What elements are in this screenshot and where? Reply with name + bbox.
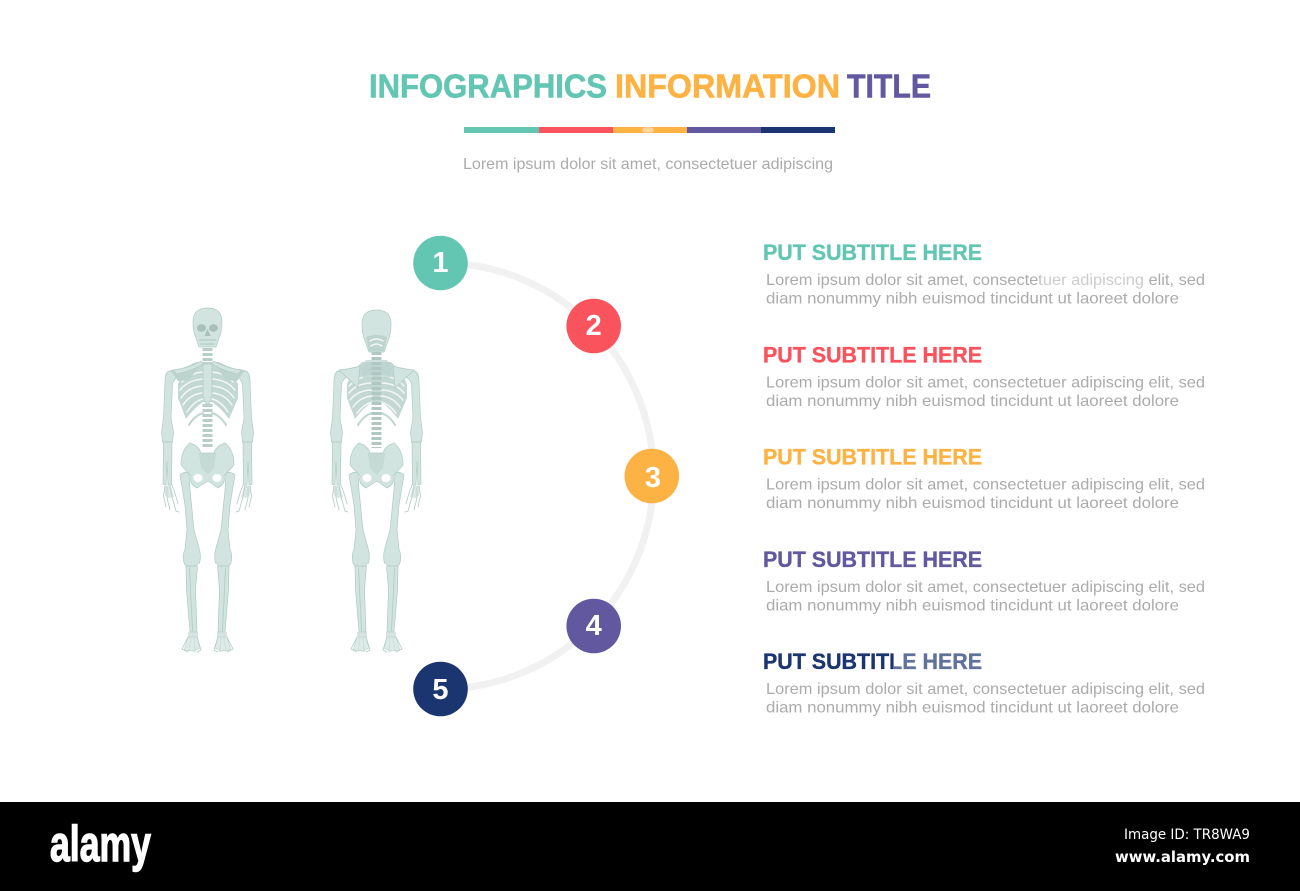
text block 1: Lorem ipsum dolor sit amet, consectetuer adipiscing elit, sed bbox=[766, 272, 1205, 289]
shoulder blades bbox=[339, 366, 414, 388]
sternum bbox=[203, 364, 212, 404]
step marker 1: 1 bbox=[432, 247, 449, 279]
text block 3: PUT SUBTITLE HERE bbox=[763, 444, 982, 470]
text block 2: Lorem ipsum dolor sit amet, consectetuer adipiscing elit, sed bbox=[766, 374, 1205, 391]
footer bar bbox=[0, 802, 1300, 891]
step marker 3: 3 bbox=[645, 462, 661, 494]
title: TITLE bbox=[847, 68, 931, 104]
text block 5 bbox=[763, 649, 1205, 716]
back of skull bbox=[362, 310, 391, 352]
back rib cage bbox=[347, 362, 407, 425]
text block 3: diam nonummy nibh euismod tincidunt ut laoreet dolore bbox=[766, 495, 1179, 512]
face bbox=[197, 324, 218, 344]
text block 2 bbox=[763, 342, 1205, 410]
spine bbox=[202, 348, 212, 448]
text block 1: PUT SUBTITLE HERE bbox=[763, 240, 982, 265]
text block 2: PUT SUBTITLE HERE bbox=[763, 342, 982, 367]
upper back bbox=[361, 360, 392, 378]
step marker 2 bbox=[566, 299, 621, 353]
tagline: Lorem ipsum dolor sit amet, consectetuer adipiscing bbox=[463, 156, 833, 173]
step marker 2: 2 bbox=[586, 310, 602, 342]
footer logo: alamy bbox=[50, 816, 151, 872]
title: INFOGRAPHICS bbox=[369, 68, 607, 104]
text block 5: diam nonummy nibh euismod tincidunt ut laoreet dolore bbox=[766, 700, 1179, 716]
step marker 4: 4 bbox=[586, 610, 602, 642]
text block 2: diam nonummy nibh euismod tincidunt ut laoreet dolore bbox=[766, 393, 1179, 410]
footer url: www.alamy.com bbox=[1115, 848, 1250, 866]
rib cage bbox=[178, 362, 238, 425]
text block 4: PUT SUBTITLE HERE bbox=[763, 547, 982, 572]
text block 1 bbox=[763, 240, 1205, 308]
skull bbox=[193, 308, 222, 347]
title colour bar bbox=[464, 127, 835, 133]
title: INFORMATION bbox=[615, 68, 840, 104]
back pelvis bbox=[350, 443, 403, 488]
text block 4 bbox=[763, 547, 1205, 614]
title bbox=[369, 68, 931, 104]
text block 5: Lorem ipsum dolor sit amet, consectetuer adipiscing elit, sed bbox=[766, 681, 1205, 698]
text block 5: PUT SUBTITLE HERE bbox=[763, 649, 982, 674]
step marker 5: 5 bbox=[432, 674, 449, 706]
skeleton: front view bbox=[162, 308, 254, 652]
text block 4: Lorem ipsum dolor sit amet, consectetuer adipiscing elit, sed bbox=[766, 579, 1205, 596]
image id: Image ID: TR8WA9 bbox=[1124, 827, 1250, 843]
step marker 1 bbox=[413, 236, 468, 290]
text block 1: diam nonummy nibh euismod tincidunt ut laoreet dolore bbox=[766, 290, 1179, 308]
text block 3 bbox=[763, 444, 1205, 512]
back spine bbox=[372, 352, 382, 448]
step marker 4 bbox=[566, 599, 621, 653]
text block 3: Lorem ipsum dolor sit amet, consectetuer adipiscing elit, sed bbox=[766, 476, 1205, 494]
text block 4: diam nonummy nibh euismod tincidunt ut laoreet dolore bbox=[766, 597, 1179, 614]
skeleton: back view bbox=[330, 310, 422, 652]
arc connector bbox=[440, 263, 654, 689]
pelvis bbox=[181, 443, 234, 488]
step marker 3 bbox=[624, 449, 679, 503]
step marker 5 bbox=[413, 662, 468, 716]
shoulders bbox=[170, 363, 245, 381]
